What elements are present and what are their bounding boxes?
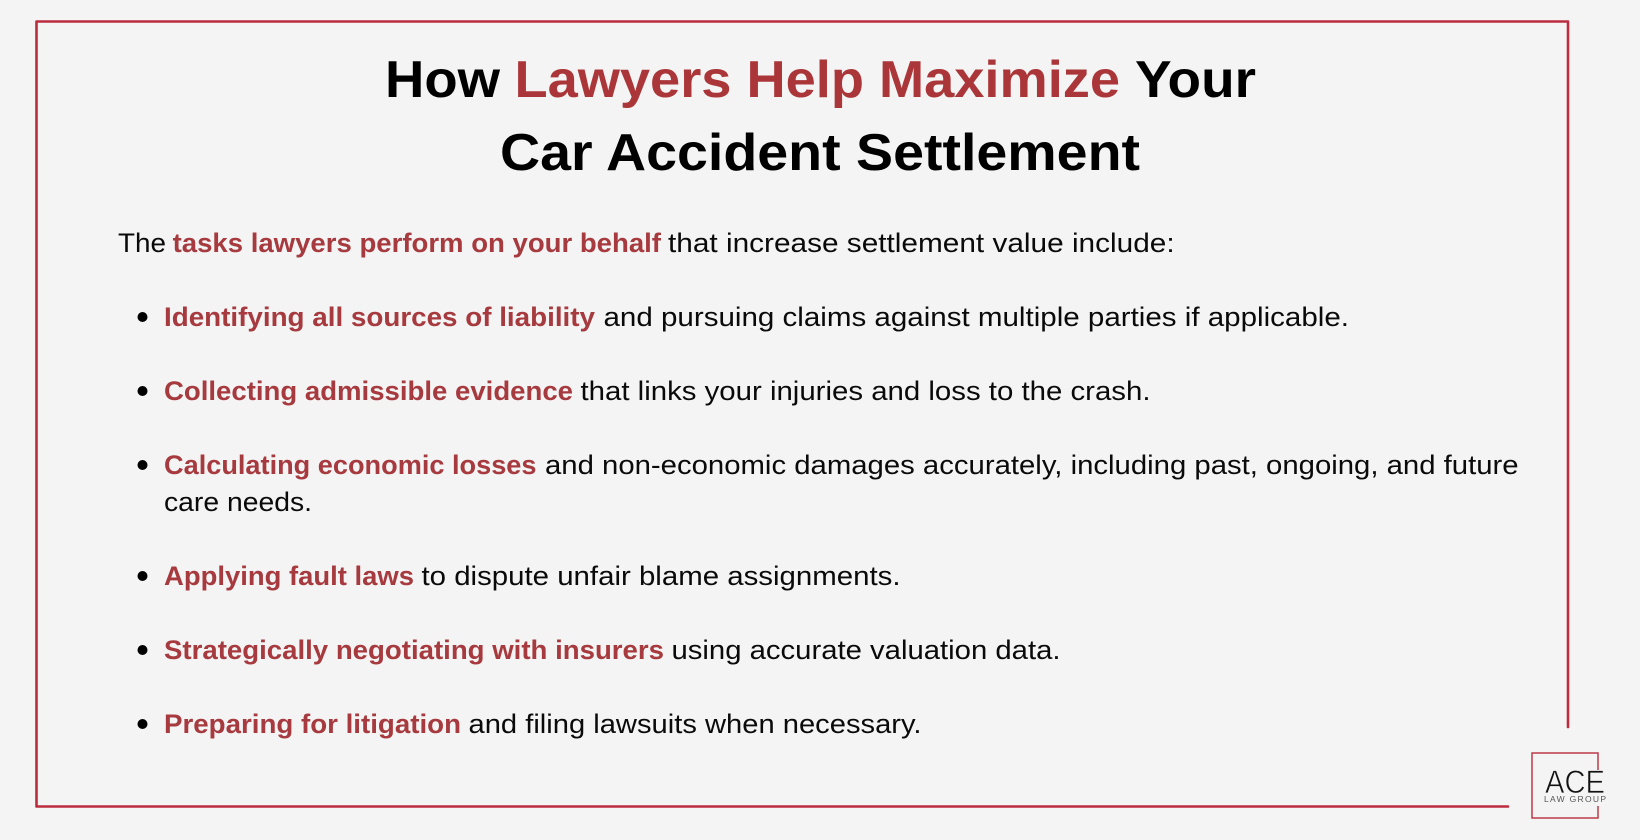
bullet: negotiating with insurers: using accurate valuation data. [672,635,1060,665]
bullet: collecting evidence [138,376,1150,406]
bullet: calculating losses [138,450,1519,517]
bullet: calculating losses: and non-economic damages accurately, including past, ongoing, and future [545,450,1519,480]
bullet: calculating losses: care needs. [164,487,312,517]
title: Car Accident Settlement [500,124,1140,182]
bullet: calculating losses: Calculating economic losses [164,450,536,480]
bullet: preparing for litigation: Preparing for litigation [164,709,461,739]
bullet: preparing for litigation: and filing lawsuits when necessary. [468,709,922,739]
bullet: negotiating with insurers: Strategically negotiating with insurers [164,635,664,665]
bullet: collecting evidence: Collecting admissible evidence [164,376,573,406]
title: How [385,51,501,109]
bullet: applying fault laws [138,561,900,591]
bullet: identifying liability: and pursuing claims against multiple parties if applicable. [604,302,1349,332]
bullet: identifying liability [138,302,1349,332]
title [385,51,1256,182]
bullet: identifying liability: Identifying all sources of liability [164,302,595,332]
title: Your [1135,51,1256,109]
logo: ACE Law Group: LAW GROUP [1544,794,1606,804]
title: Lawyers Help Maximize [514,51,1120,109]
bullet: negotiating with insurers [138,635,1060,665]
intro sentence: that increase settlement value include: [668,228,1175,258]
intro sentence [118,228,1175,258]
bullet: collecting evidence: that links your injuries and loss to the crash. [580,376,1150,406]
logo: ACE Law Group [1532,753,1606,818]
bullet list [138,302,1519,739]
logo: ACE Law Group: ACE [1545,764,1605,800]
intro sentence: tasks lawyers perform on your behalf [173,228,662,258]
bullet: preparing for litigation [138,709,922,739]
bullet: applying fault laws: to dispute unfair blame assignments. [422,561,900,591]
bullet: applying fault laws: Applying fault laws [164,561,414,591]
intro sentence: The [118,228,166,258]
